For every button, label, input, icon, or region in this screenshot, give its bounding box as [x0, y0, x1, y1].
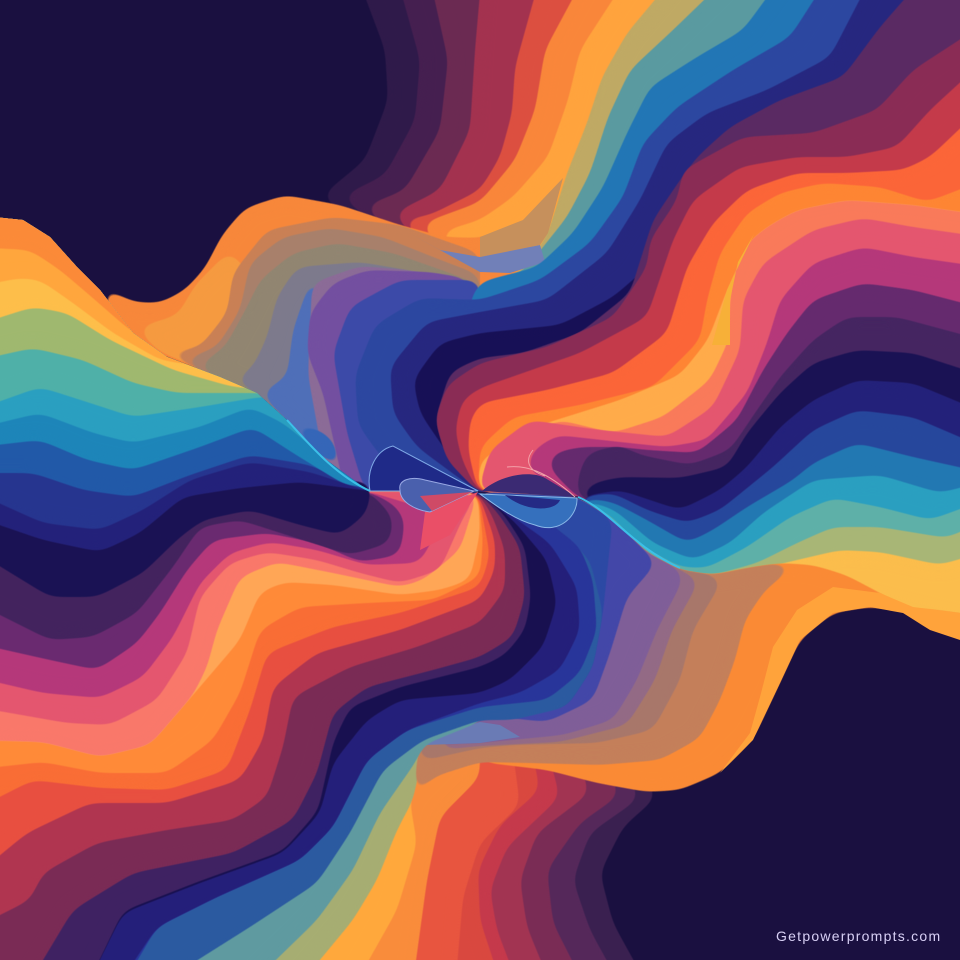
upper-left wave	[100, 195, 540, 492]
lower-left flame bands	[0, 460, 505, 930]
tan tip and lavender tip	[407, 178, 563, 273]
wave tail highlight	[720, 587, 960, 773]
centre: left lens	[369, 446, 478, 512]
top bands	[320, 0, 960, 500]
upper-right flame bands	[435, 20, 960, 625]
right arm bands	[577, 380, 960, 640]
bottom bands	[0, 480, 657, 960]
inner curls of upper spiral	[355, 0, 960, 500]
watermark: Getpowerprompts.com	[776, 928, 941, 944]
inner curls of lower spiral	[0, 480, 603, 960]
pink fan near centre	[420, 492, 478, 550]
lower-right wave	[413, 492, 960, 800]
flame tip	[712, 234, 754, 345]
lavender tip	[425, 722, 520, 745]
highlight lines at arm tips	[287, 420, 680, 568]
left arm bands	[0, 218, 368, 550]
centre: right lens	[480, 450, 577, 528]
